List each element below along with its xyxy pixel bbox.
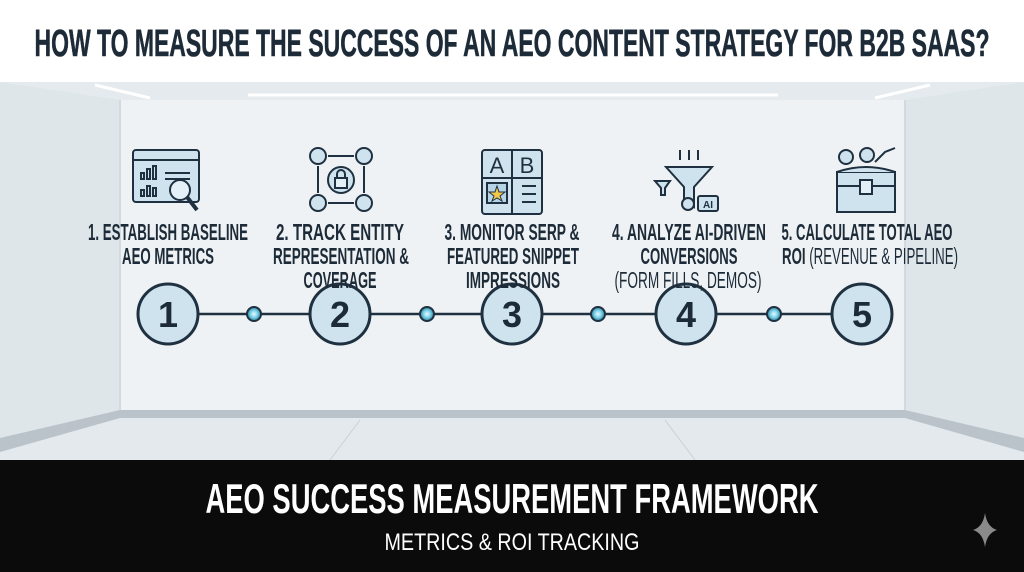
- label 1: 1. ESTABLISH BASELINE: [88, 219, 248, 245]
- label 5: [782, 219, 958, 269]
- label 2: [273, 219, 409, 293]
- icon: treasure chest: [837, 148, 895, 212]
- timeline: 3: [502, 294, 522, 335]
- timeline: [138, 284, 892, 344]
- label 3: [444, 219, 580, 293]
- timeline: 2: [330, 294, 350, 335]
- label 4: CONVERSIONS: [640, 243, 738, 269]
- title band: [0, 0, 1024, 82]
- label 4: [612, 219, 766, 293]
- icon: entity network: [310, 148, 372, 211]
- timeline: 1: [158, 294, 178, 335]
- room background: [0, 82, 1024, 460]
- label 2: 2. TRACK ENTITY: [276, 219, 404, 245]
- footer band: [0, 460, 1024, 572]
- icon: A/B test: B: [520, 153, 534, 178]
- label 1: [88, 219, 248, 269]
- step labels: [88, 219, 958, 293]
- label 4: (FORM FILLS, DEMOS): [614, 267, 762, 293]
- label 3: IMPRESSIONS: [466, 267, 560, 293]
- label 4: 4. ANALYZE AI-DRIVEN: [612, 219, 766, 245]
- icon: analytics browser: [133, 150, 199, 210]
- icon: conversion funnel: AI: [703, 200, 713, 211]
- label 3: 3. MONITOR SERP &: [444, 219, 580, 245]
- timeline: 4: [676, 294, 696, 335]
- icon: sparkle: [973, 513, 997, 547]
- label 2: COVERAGE: [304, 267, 376, 293]
- timeline: 5: [852, 294, 872, 335]
- label 3: FEATURED SNIPPET: [447, 243, 579, 269]
- icon: A/B test: A: [490, 153, 505, 178]
- icon: conversion funnel: [655, 150, 718, 211]
- label 2: REPRESENTATION &: [273, 243, 409, 269]
- icon: A/B test: [482, 150, 542, 214]
- label 1: AEO METRICS: [122, 243, 214, 269]
- footer subtitle: METRICS & ROI TRACKING: [384, 529, 640, 556]
